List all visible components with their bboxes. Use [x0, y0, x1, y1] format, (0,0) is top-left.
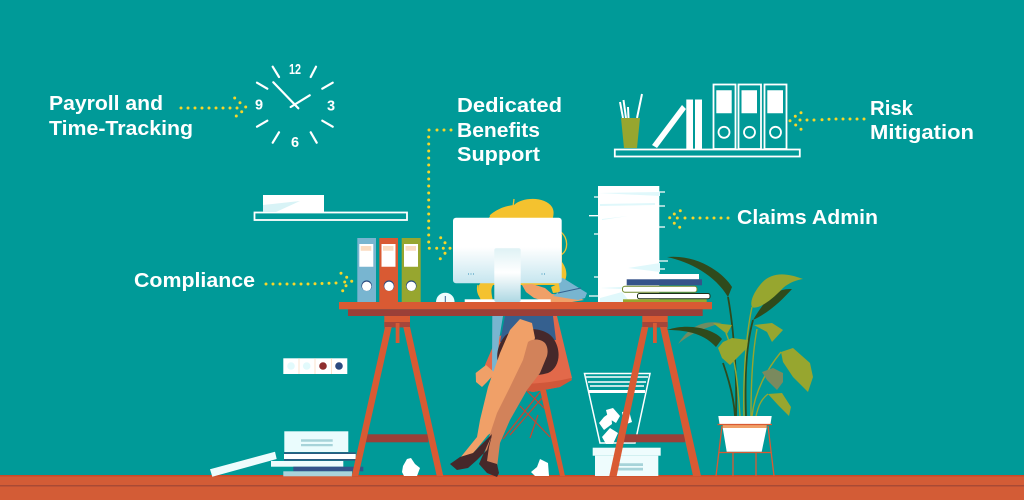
desk books — [622, 274, 710, 302]
label: compliance: Compliance — [134, 270, 255, 292]
dark leaves — [667, 257, 792, 347]
label: claims admin: Claims Admin — [737, 207, 878, 229]
skirt — [497, 329, 559, 376]
label: risk mitigation — [870, 98, 974, 144]
arrow: payroll to clock — [181, 98, 246, 116]
icon: white books — [652, 100, 702, 149]
arrow: compliance to binders — [266, 273, 352, 291]
stack of books and papers on floor — [210, 431, 363, 477]
desk trestle: right — [609, 316, 701, 476]
arrow: benefits support to monitor — [429, 130, 451, 259]
label: risk mitigation: Mitigation — [870, 122, 974, 144]
floor — [0, 475, 1024, 500]
blue folders — [357, 238, 421, 302]
icon: wall clock: 9 — [255, 98, 263, 114]
icon: wall clock — [255, 62, 335, 151]
arrow: claims admin to paper stack — [670, 211, 728, 227]
grey leaf — [762, 368, 783, 390]
waste bin — [584, 374, 661, 476]
woman: hair behind monitor — [478, 199, 567, 302]
woman: lower body — [450, 316, 559, 477]
label: risk mitigation: Risk — [870, 98, 914, 120]
hand — [476, 365, 495, 387]
wall outlet — [283, 358, 347, 374]
icon: pen cup — [620, 94, 642, 148]
shelf: left outline shelf with box — [254, 195, 407, 220]
label: payroll and time-tracking — [49, 93, 193, 140]
back leg — [483, 339, 548, 465]
desk top — [339, 302, 712, 316]
label: dedicated benefits support: Benefits — [457, 120, 540, 142]
box under bin — [593, 448, 661, 476]
olive leaves — [713, 274, 813, 416]
potted plant — [667, 257, 813, 476]
pot — [718, 416, 772, 452]
stems — [723, 297, 753, 416]
paper stack — [589, 186, 668, 302]
icon: wall clock: 12 — [289, 62, 301, 78]
high heel shoes — [450, 434, 499, 477]
shelf: right outline shelf — [615, 84, 800, 156]
chair — [485, 316, 572, 476]
label: payroll and time-tracking: Payroll and — [49, 93, 163, 115]
monitor — [453, 218, 562, 302]
icon: wall clock: 6 — [291, 135, 299, 151]
label: dedicated benefits support — [457, 95, 562, 166]
sleeve and arm under desk — [492, 316, 503, 372]
label: dedicated benefits support: Dedicated — [457, 95, 562, 117]
front leg — [460, 319, 535, 458]
label: dedicated benefits support: Support — [457, 144, 540, 166]
desk trestle: left — [352, 316, 443, 476]
desk clock — [436, 293, 455, 302]
blouse and skirt top — [500, 316, 556, 342]
plant stand — [716, 424, 774, 476]
arrow: risk mitigation to binders — [790, 113, 864, 129]
woman: arm and hand — [522, 278, 587, 302]
icon: outline binders — [714, 84, 786, 149]
crumpled paper — [402, 458, 549, 476]
icon: wall clock: 3 — [327, 98, 335, 114]
label: payroll and time-tracking: Time-Tracking — [49, 118, 193, 140]
faded leaf — [678, 322, 722, 344]
